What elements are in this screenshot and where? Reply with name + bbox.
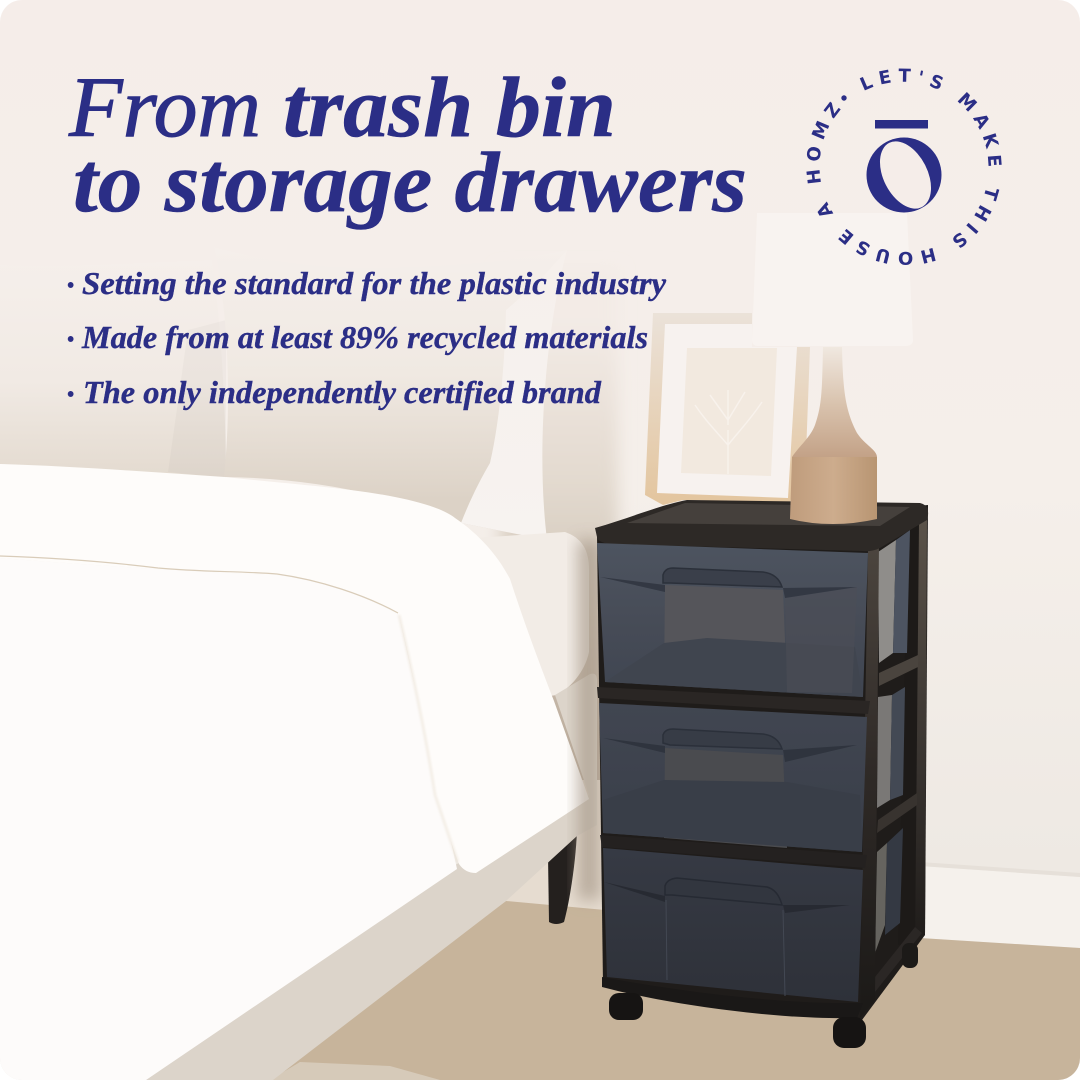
duvet fold edge	[399, 615, 458, 862]
bottom drawer handle	[665, 878, 782, 905]
side outer post	[916, 520, 927, 936]
duvet fold line	[0, 556, 398, 613]
bullet 1: •	[67, 275, 74, 297]
wheel right	[833, 1017, 866, 1048]
circular slogan: LET'S MAKE THIS HOUSE A HOMZ	[806, 68, 1002, 265]
bullet 3: The only independently certified brand	[83, 374, 602, 410]
title: trash bin	[283, 59, 616, 155]
bullet 2: Made from at least 89% recycled materials	[81, 319, 648, 355]
bullet list	[67, 265, 667, 410]
picture frame	[645, 313, 810, 505]
cabinet shadow	[578, 540, 600, 900]
bullet 1: Setting the standard for the plastic industry	[82, 265, 667, 301]
lamp base	[790, 347, 877, 524]
pillow back shaded strip	[168, 320, 226, 478]
bullet 2: •	[67, 329, 74, 351]
pillow back left	[0, 392, 226, 477]
pillow white edge	[461, 333, 550, 535]
slogan dot	[841, 95, 847, 101]
storage drawers cabinet	[595, 500, 928, 1048]
wheel left	[609, 993, 643, 1020]
rail 1	[597, 687, 870, 714]
bottom rail	[602, 977, 863, 1018]
top drawer side panel	[785, 587, 857, 693]
pillow front	[226, 376, 499, 528]
wall texture beside bed	[494, 350, 624, 780]
side window bottom	[875, 843, 887, 953]
top drawer handle	[663, 568, 782, 587]
bed side cover	[0, 558, 457, 1080]
middle drawer	[599, 703, 867, 852]
title	[68, 59, 747, 230]
side window top	[878, 540, 896, 663]
bottom drawer	[603, 848, 863, 1002]
title: From	[68, 59, 261, 155]
top drawer window	[664, 585, 785, 643]
top drawer ridges	[600, 577, 665, 592]
skirting board	[920, 866, 1080, 948]
front post	[863, 548, 879, 953]
bed leg	[548, 830, 577, 924]
title: to storage drawers	[73, 134, 747, 230]
wall below bed	[506, 780, 602, 910]
side inner post	[914, 524, 919, 900]
top tray	[627, 503, 910, 526]
letter o	[866, 138, 942, 212]
cabinet body	[597, 505, 928, 1020]
rail 2	[600, 835, 602, 844]
carpet floor	[260, 901, 1080, 1080]
side window middle	[877, 695, 892, 808]
cabinet top	[595, 500, 928, 551]
rug edge	[270, 1062, 440, 1080]
side shelves	[879, 655, 918, 686]
wheel back	[902, 943, 918, 968]
macron bar	[875, 120, 928, 128]
mattress	[496, 532, 589, 696]
folded duvet	[0, 464, 589, 873]
middle drawer handle	[663, 729, 782, 749]
badge logo	[806, 68, 1002, 265]
top drawer	[597, 543, 868, 697]
lamp shade	[752, 213, 913, 346]
bullet 3: •	[67, 384, 74, 406]
bed frame	[146, 674, 597, 1080]
